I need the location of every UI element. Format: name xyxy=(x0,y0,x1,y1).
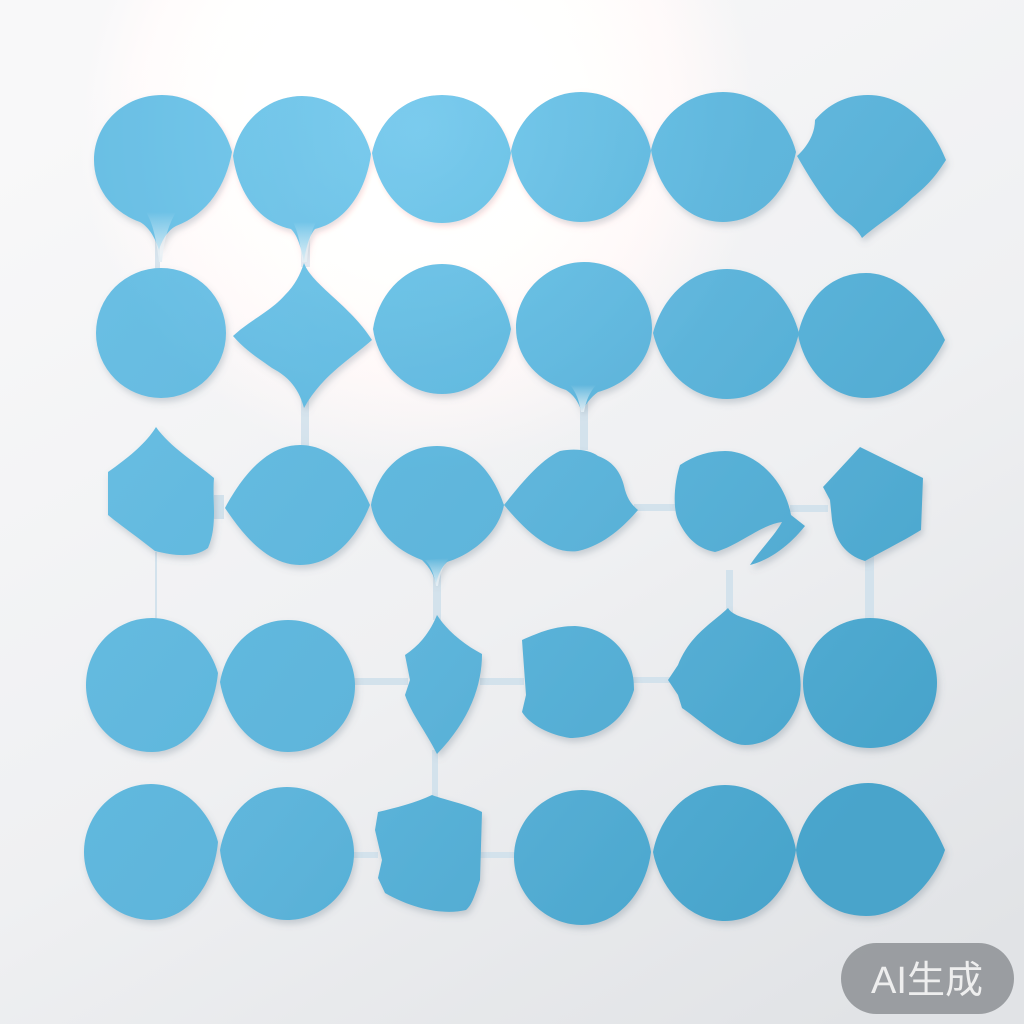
node r3c2 xyxy=(225,445,370,565)
node r4c6 xyxy=(803,618,937,748)
node r4c4 xyxy=(522,626,634,738)
node r4c2 xyxy=(220,620,355,752)
faded tails xyxy=(146,212,596,586)
node r1c2 xyxy=(233,96,371,262)
node r3c1 xyxy=(108,427,214,555)
node r5c6 xyxy=(796,783,945,916)
node r1c3 xyxy=(372,95,511,223)
node r2c6 xyxy=(798,273,945,398)
node r2c3 xyxy=(373,264,511,394)
node r3c5 xyxy=(675,451,805,565)
node r5c3 xyxy=(375,795,482,912)
node r2c5 xyxy=(653,269,799,399)
node r4c1 xyxy=(86,618,218,752)
node r5c5 xyxy=(653,785,796,921)
node r2c1 xyxy=(96,268,226,398)
node r5c1 xyxy=(84,784,218,920)
node r4c3 xyxy=(405,615,482,754)
connectors xyxy=(155,225,874,858)
node r5c2 xyxy=(220,787,354,920)
nodes xyxy=(84,92,946,925)
node r1c4 xyxy=(511,92,651,222)
node r1c1 xyxy=(94,95,232,250)
node r1c6 xyxy=(797,95,946,238)
node r3c4 xyxy=(504,450,638,551)
node r3c3 xyxy=(371,446,504,584)
AI badge xyxy=(841,943,1014,1014)
node r3c6 xyxy=(823,447,923,561)
badge label: AI生成 xyxy=(871,960,983,1002)
node r1c5 xyxy=(651,92,796,222)
node r2c2 xyxy=(233,263,372,408)
node r2c4 xyxy=(516,262,652,412)
node r4c5 xyxy=(668,608,801,745)
node r5c4 xyxy=(514,790,651,925)
